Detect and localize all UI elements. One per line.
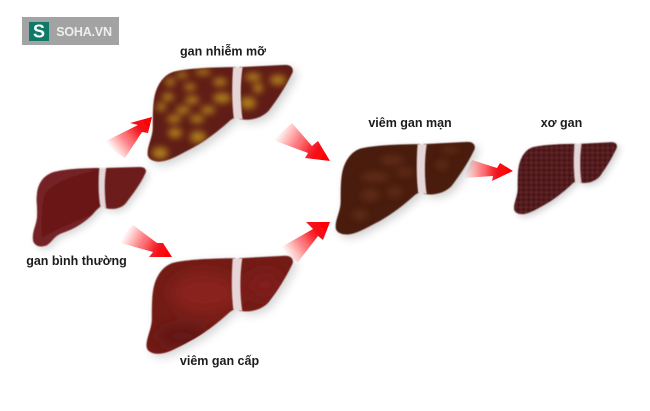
label: fatty liver: gan nhiễm mỡ (180, 44, 266, 58)
arrow: acute hepatitis to chronic hepatitis (278, 222, 330, 262)
label: chronic hepatitis: viêm gan mạn (368, 116, 452, 130)
logo mark: S (33, 22, 45, 42)
arrow: fatty liver to chronic hepatitis (273, 123, 330, 161)
arrow: normal to fatty liver (102, 117, 152, 158)
fat deposits (152, 69, 286, 159)
liver: normal (33, 167, 149, 249)
label: acute hepatitis: viêm gan cấp (180, 354, 259, 368)
label: normal liver: gan bình thường (26, 254, 127, 268)
liver: cirrhosis (514, 142, 620, 217)
liver: fatty (148, 65, 297, 165)
liver: chronic hepatitis (336, 142, 479, 238)
nodular texture (514, 142, 617, 214)
logo: SOHA.VN (22, 17, 119, 45)
liver: acute hepatitis (147, 256, 297, 357)
mottled patches (352, 147, 459, 220)
label: cirrhosis: xơ gan (541, 116, 582, 130)
logo text: SOHA.VN (56, 25, 112, 39)
inflamed area (154, 272, 283, 346)
arrow: normal to acute hepatitis (117, 225, 172, 257)
arrow: chronic hepatitis to cirrhosis (463, 160, 513, 181)
